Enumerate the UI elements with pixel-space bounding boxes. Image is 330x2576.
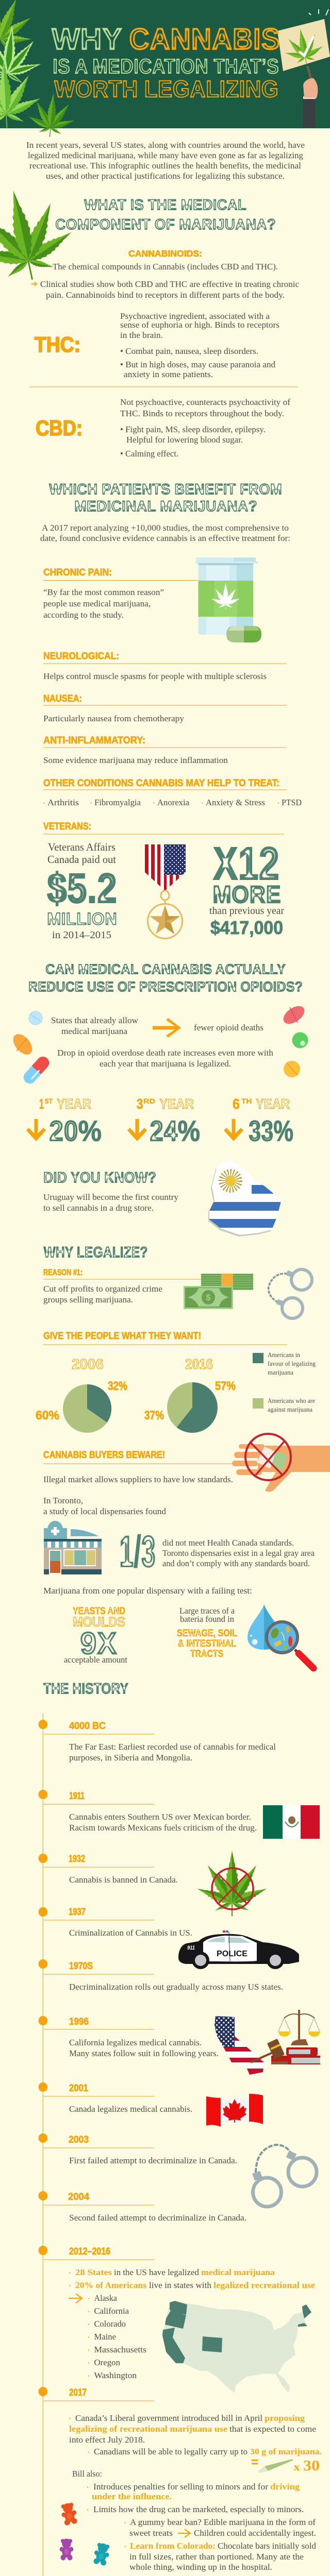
title: IS A MEDICATION THAT’S [53,55,279,78]
stat: third year: YEAR [159,1096,194,1112]
timeline: 2012-2016: live in states with [149,2280,211,2290]
stat: veterans payout: in 2014–2015 [52,929,111,941]
timeline: 2004: Second failed attempt to decriminalize in Canada. [69,2213,246,2223]
text: CBD details: Helpful for lowering blood sugar. [126,435,243,445]
text: THC details: • Combat pain, nausea, sleep disorders. [120,346,258,356]
stat: twelve times more: MORE [212,881,281,909]
icon: police car [178,1930,299,1969]
legend: Americans in [268,1351,300,1359]
timeline: 1970s [38,1959,283,1992]
subheading: anti-inflammatory: ANTI-INFLAMMATORY: [43,735,145,746]
chart: pie 2006 [36,1356,127,1433]
timeline: 2017: into effect July 2018. [69,2435,145,2445]
icon: handcuffs [269,1269,312,1318]
list: legal states [88,2293,146,2380]
timeline: 1996 [38,2016,219,2058]
text: toronto study: In Toronto, [43,1496,83,1505]
stat: third year [127,1096,200,1148]
text: anti-inflammatory: Some evidence marijuana may reduce inflammation [43,755,228,765]
label: CBD: CBD: [36,416,82,440]
panel: medical component [0,180,299,459]
text: bill provisions: sweet treats [129,2528,173,2538]
timeline: 2004: 2004 [68,2192,89,2202]
heading: medical component: WHAT IS THE MEDICAL [84,197,246,213]
text: clinical studies: pain. Cannabinoids bind to receptors in different parts of the body. [46,290,285,300]
timeline: 1996: 1996 [69,2016,89,2027]
subheading: reason 1: REASON #1: [43,1267,82,1277]
timeline: 2012-2016: medical marijuana [201,2267,275,2277]
legend: Americans who are [268,1397,315,1404]
heading: opioids: CAN MEDICAL CANNABIS ACTUALLY [45,961,286,977]
stat: bacteria: & INTESTINAL [178,1638,236,1649]
label: THC: THC: [35,332,80,357]
text: bill provisions: Limits how the drug can be marketed, especially to minors. [93,2504,304,2514]
timeline: 1970s: Decriminalization rolls out gradually across many US states. [69,1982,283,1992]
timeline: 4000 BC: purposes, in Siberia and Mongolia. [69,1753,192,1762]
title: WHY [52,22,122,56]
chart: pie 2016: 37% [144,1409,164,1422]
text: did not meet standards: and don’t comply with any standards board. [162,1558,310,1568]
panel: header banner [0,0,330,139]
timeline: 2003: 2003 [69,2134,89,2145]
timeline: 2012-2016: in the US have legalized [114,2267,199,2277]
title [52,22,280,102]
icon: money [184,1274,253,1309]
icon: pill bottle [196,557,261,642]
stat: bacteria: bateria found in [180,1614,234,1624]
timeline: 2017: 2017 [69,2387,87,2398]
text: reason 1 [43,1284,162,1304]
timeline: 1911 [38,1790,257,1833]
icon: handcuffs large [252,2145,317,2207]
chart: pie 2016: 2016 [185,1356,213,1372]
text: chronic pain [43,587,164,620]
icon: gummy bears [59,2502,111,2566]
icon: hand with banned bag [232,1434,330,1492]
text: bill provisions: Learn from Colorado: [130,2541,216,2551]
icon: cannabis leaves [0,0,78,139]
text: bill provisions: Children could accidentally ingest. [194,2528,316,2538]
chart: pie 2006: 32% [108,1379,127,1393]
stat: twelve times more: than previous year [209,905,284,917]
heading: why legalize: WHY LEGALIZE? [43,1244,147,1261]
text: nausea: Particularly nausea from chemotherapy [43,714,184,723]
icon: scales, books and gavel [251,2010,320,2064]
timeline: 1970s: 1970S [69,1961,93,1972]
chart: pie 2016 [144,1356,236,1433]
stat: sixth year [224,1096,293,1148]
timeline: 1937: 1937 [69,1907,86,1918]
list: legal states: Massachusetts [94,2345,146,2354]
text: neurological: Helps control muscle spasms for people with multiple sclerosis [43,671,267,681]
timeline: 2012-2016: legalized recreational use [213,2280,315,2290]
timeline: 2001 [38,2082,192,2114]
text: reason 1: Cut off profits to organized crime [43,1284,162,1294]
stat: one third: 1/3 [119,1527,156,1577]
text: CBD details: • Fight pain, MS, sleep disorder, epilepsy. [120,425,266,434]
subheading: give the people: GIVE THE PEOPLE WHAT THEY WANT! [43,1330,201,1342]
timeline: 1932: 1932 [69,1854,85,1865]
timeline: 2003 [38,2133,237,2165]
timeline: 2012-2016 [38,2246,315,2303]
list: legal states: Washington [94,2370,137,2380]
text: bill provisions: in full sizes, rather than portioned. Many ate the [129,2552,304,2562]
list: other conditions: Arthritis [47,798,79,807]
stat: yeasts and moulds [64,1606,127,1665]
icon: small arrow [31,281,38,286]
stat: first year: ST [44,1097,53,1105]
text: toronto study: a study of local dispensaries found [43,1506,166,1516]
stat: bacteria: TRACTS [190,1648,223,1659]
text: uruguay: Uruguay will become the first country [43,1192,179,1202]
text: uruguay: to sell cannabis in a drug store. [43,1203,154,1213]
text: states allow [51,1015,139,1036]
icon: water drop with magnifier [248,1604,314,1668]
stat: yeasts and moulds: MOULDS [73,1614,125,1630]
text: reason 1: groups selling marijuana. [43,1295,133,1304]
stat: first year: 1 [39,1096,44,1112]
heading: which patients benefit: MEDICINAL MARIJUANA? [74,498,257,515]
stat: twelve times more [209,838,284,938]
stat: twelve times more: X12 [213,838,279,890]
stat: third year: RD [143,1097,155,1105]
icon: joint times thirty: x [293,2462,300,2473]
timeline: 1911: 1911 [69,1791,85,1802]
subheading: nausea: NAUSEA: [43,693,82,704]
stat: veterans payout: Veterans Affairs [48,841,116,853]
intro paragraph: In recent years, several US states, along with countries around the world, have [26,140,305,150]
stat: sixth year: TH [241,1097,252,1105]
stat: veterans payout: $5.2 [47,865,117,912]
heading: medical component [55,197,276,233]
list: legal states: California [94,2306,129,2316]
text: chronic pain: “By far the most common reason” [43,587,164,597]
subheading: cannabinoids: CANNABINOIDS: [128,248,202,259]
title: CANNABIS [129,22,280,56]
timeline: 1911: Racism towards Mexicans fuels criticism of the drug. [69,1823,257,1833]
text: bill provisions [72,2469,324,2576]
icon: california flag map [214,2016,264,2075]
text: THC details: in the brain. [120,330,163,340]
icon: uruguay flag map [206,1159,284,1236]
text: THC details: sense of euphoria or high. Binds to receptors [120,320,279,330]
stat: veterans payout [47,841,117,941]
icon: cannabis leaf [0,180,81,290]
timeline: 1932: Cannabis is banned in Canada. [69,1875,178,1885]
timeline: 1996: Many states follow suit in following years. [69,2048,219,2058]
heading: medical component: COMPONENT OF MARIJUANA? [55,216,276,233]
timeline: 1996: California legalizes medical cannabis. [69,2038,202,2047]
heading: which patients benefit [49,481,282,515]
text: toronto study [43,1496,166,1516]
timeline: 2003: First failed attempt to decriminalize in Canada. [69,2156,237,2165]
icon: medal [145,844,186,939]
stat: bacteria: Large traces of a [179,1606,235,1616]
icon: pills [9,1003,308,1086]
text: CBD details: Not psychoactive, counteracts psychoactivity of [120,397,290,407]
text: report intro: A 2017 report analyzing +10,000 studies, the most comprehensive to [42,523,289,533]
icon: mexican flag [263,1805,320,1839]
stat: yeasts and moulds: YEASTS AND [73,1606,125,1617]
heading: did you know: DID YOU KNOW? [43,1170,156,1186]
text: CBD details: THC. Binds to receptors throughout the body. [120,409,284,418]
timeline: 2017: 30 g of marijuana. [250,2447,322,2456]
timeline: 2017: Canada’s Liberal government introduced bill in April [75,2413,262,2423]
stat: first year: 20% [49,1115,102,1148]
text: states allow: medical marijuana [61,1026,127,1036]
timeline: 4000 BC: The Far East: Earliest recorded use of cannabis for medical [69,1742,276,1752]
text: uruguay [43,1192,179,1213]
icon: joint times thirty: 30 [303,2458,320,2474]
timeline: 2017: legalizing of recreational marijuana use [69,2424,227,2434]
legend [253,1351,316,1413]
text: THC details: • But in high doses, may cause paranoia and [120,360,275,369]
icon: joint times thirty [251,2455,320,2474]
stat: yeasts and moulds: 9X [80,1626,117,1661]
intro paragraph: uses, and other practical justifications for legalizing this substance. [46,171,285,181]
chart: pie 2016: 57% [215,1379,236,1393]
list: legal states: Alaska [94,2293,117,2303]
icon: police car: POLICE [217,1950,248,1958]
text: fewer deaths: fewer opioid deaths [194,1023,263,1032]
list: legal states: Colorado [94,2319,126,2329]
list: other conditions [43,798,302,807]
panel: did you know [43,1159,284,1236]
text: clinical studies [40,279,299,300]
text: chronic pain: people use medical marijuana, [43,599,151,608]
heading: opioids: REDUCE USE OF PRESCRIPTION OPIOIDS? [28,979,303,994]
intro paragraph: legalized medicinal marijuana, while many have even gone as far as legalizing [28,150,303,160]
stat: third year: 24% [150,1115,200,1148]
timeline: 2004 [38,2191,246,2223]
subheading: buyers beware: CANNABIS BUYERS BEWARE! [43,1449,165,1461]
arrow [153,1018,181,1038]
text: report intro [40,523,290,543]
title: WORTH LEGALIZING [54,75,278,102]
stat: sixth year: 33% [249,1115,293,1148]
heading: opioids [28,961,303,994]
stat: bacteria [177,1606,237,1659]
timeline: 2012-2016: 2012–2016 [69,2246,110,2257]
icon: canadian flag [206,2094,263,2127]
text: THC details: Psychoactive ingredient, associated with a [120,311,270,321]
chart: pie 2006: 2006 [72,1356,104,1372]
icon: banned leaf [195,1851,269,1916]
stat: yeasts and moulds: acceptable amount [64,1655,127,1665]
list: legal states: Maine [94,2332,116,2342]
timeline: 2012-2016: 28 States [75,2267,112,2277]
text: bill provisions: Chocolate bars initially sold [218,2541,316,2551]
text: bill provisions: Introduces penalties for selling to minors and for [93,2482,268,2492]
text: report intro: date, found conclusive evidence cannabis is an effective treatment for: [40,533,290,543]
panel: why legalize [36,1244,330,1668]
map: united states [162,2301,311,2393]
text: bill provisions: under the influence. [92,2492,172,2501]
stat: bacteria: SEWAGE, SOIL [177,1628,237,1639]
stat: veterans payout: Canada paid out [47,853,116,866]
timeline: 2017: that is expected to come [229,2424,316,2434]
stat: third year: 3 [137,1096,143,1112]
list: other conditions: PTSD [282,798,302,807]
text: bill provisions: whole thing, winding up in the hospital. [129,2562,272,2572]
text: bill provisions: driving [270,2482,300,2492]
icon: joint times thirty: = [251,2455,258,2469]
subheading: other conditions: OTHER CONDITIONS CANNABIS MAY HELP TO TREAT: [43,777,279,789]
list: other conditions: Fibromyalgia [94,798,141,807]
intro paragraph [26,140,305,181]
text: CBD details: • Calming effect. [120,449,178,459]
legend: against marijuana [268,1405,312,1413]
panel: reduce opioid use [9,961,308,1148]
list: other conditions: Anxiety & Stress [206,798,265,807]
list: legal states: Oregon [94,2358,120,2367]
timeline: 2001: Canada legalizes medical cannabis. [69,2104,192,2114]
subheading: neurological: NEUROLOGICAL: [43,650,119,662]
stat: sixth year: 6 [233,1096,240,1112]
intro paragraph: recreational use. This infographic outlines the health benefits, the medicinal [29,161,301,171]
timeline: 4000 BC [38,1720,276,1762]
heading: the history: THE HISTORY [43,1681,128,1697]
panel: the history timeline [38,1681,324,2576]
stat: sixth year: YEAR [256,1096,290,1112]
text: THC details [120,311,279,379]
subheading: veterans: VETERANS: [43,821,91,832]
text: bill provisions: A gummy bear ban? Edible marijuana in the form of [130,2517,316,2527]
list: other conditions: Anorexia [157,798,189,807]
text: death rate: Drop in opioid overdose death rate increases even more with [57,1048,273,1058]
timeline: 1937: Criminalization of Cannabis in US. [69,1928,192,1938]
text: death rate [57,1048,273,1069]
timeline: 2001: 2001 [69,2083,88,2094]
stat: first year: YEAR [57,1096,91,1112]
text: clinical studies: Clinical studies show both CBD and THC are effective in treating chronic [40,279,299,289]
timeline: 2017 [38,2387,322,2456]
icon: hand holding sign [277,9,330,128]
legend: marijuana [268,1368,293,1376]
text: failing test: Marijuana from one popular dispensary with a failing test: [43,1586,252,1596]
text: did not meet standards: did not meet Health Canada standards. [162,1538,294,1548]
icon: money: $ [206,1293,211,1302]
chart: pie 2006: 60% [36,1409,59,1422]
timeline: 1937 [38,1907,192,1938]
text: did not meet standards: Toronto dispensaries exist in a legal gray area [162,1548,315,1558]
timeline: 4000 BC: 4000 BC [69,1721,106,1732]
text: bill provisions: Bill also: [72,2469,102,2479]
heading: which patients benefit: WHICH PATIENTS BENEFIT FROM [49,481,282,498]
text: death rate: each year that marijuana is legalized. [100,1059,231,1069]
subheading: chronic pain: CHRONIC PAIN: [43,567,112,578]
text: chronic pain: according to the study. [43,610,124,620]
text: THC details: anxiety in some patients. [124,369,213,379]
text: states allow: States that already allow [51,1015,139,1025]
timeline: 2017: proposing [265,2413,305,2423]
icon: dispensary shop [44,1521,102,1574]
text: CBD details [120,397,290,459]
stat: veterans payout: MILLION [47,909,117,929]
icon: police car: 911 [187,1945,195,1951]
stat: first year [26,1096,102,1148]
timeline: 2017: Canadians will be able to legally carry up to [94,2447,248,2456]
stat: twelve times more: $417,000 [210,917,283,938]
timeline: 1911: Cannabis enters Southern US over Mexican border. [69,1812,251,1822]
timeline: 2012-2016: 20% of Americans [75,2280,146,2290]
timeline: 1932 [38,1854,178,1885]
text: cannabinoids definition: The chemical compounds in Cannabis (includes CBD and THC). [53,262,278,272]
text: did not meet standards [162,1538,315,1568]
legend: favour of legalizing [268,1360,316,1367]
panel: which patients benefit [40,481,302,941]
text: illegal market: Illegal market allows suppliers to have low standards. [43,1475,233,1484]
